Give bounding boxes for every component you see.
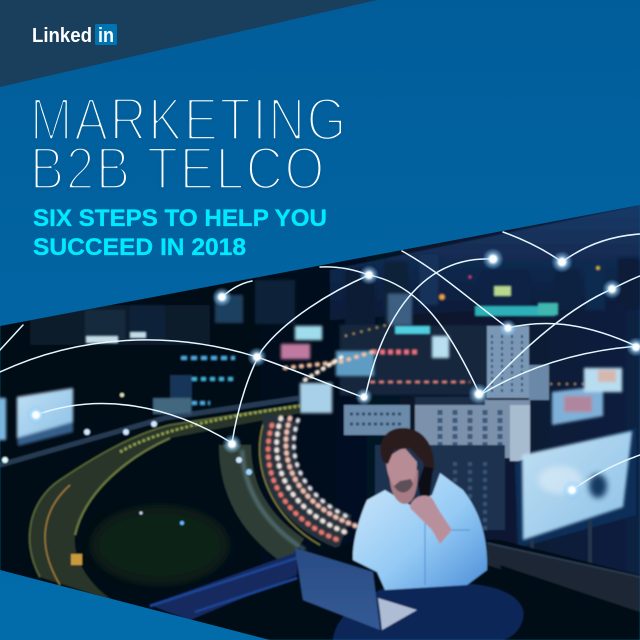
title: MARKETING — [30, 86, 348, 153]
city lights — [86, 266, 620, 415]
night sky and city base — [0, 200, 640, 640]
trees — [90, 505, 230, 585]
subtitle — [33, 205, 327, 261]
laptop keyboard — [378, 598, 417, 630]
dark header band — [0, 0, 377, 87]
big billboard — [515, 428, 636, 580]
trousers — [333, 584, 523, 640]
hair — [380, 427, 434, 474]
title: B2B TELCO — [30, 135, 326, 202]
distant skyline — [30, 255, 640, 395]
LinkedIn logo: Linked — [32, 25, 92, 47]
traffic lights on highway — [268, 352, 372, 540]
subtitle: SIX STEPS TO HELP YOU — [33, 205, 327, 232]
network lines — [0, 232, 640, 490]
photo scene without network overlay — [0, 200, 640, 640]
hand and forearm — [410, 496, 452, 544]
network glow nodes — [26, 248, 640, 500]
vehicles and street lamps — [2, 393, 252, 565]
hero photo: city at night with man on rooftop — [0, 200, 640, 640]
billboards — [0, 326, 622, 446]
man on phone with laptop — [295, 428, 523, 640]
subtitle: SUCCEED IN 2018 — [33, 234, 246, 261]
phone — [418, 466, 433, 498]
highway curves — [0, 398, 345, 600]
LinkedIn logo: in — [98, 25, 114, 47]
rooftop ledge and floor — [150, 535, 640, 640]
office buildings — [344, 326, 549, 530]
title — [30, 86, 348, 202]
neck and face — [390, 470, 418, 504]
shirt — [353, 473, 487, 590]
laptop screen back — [295, 548, 380, 630]
